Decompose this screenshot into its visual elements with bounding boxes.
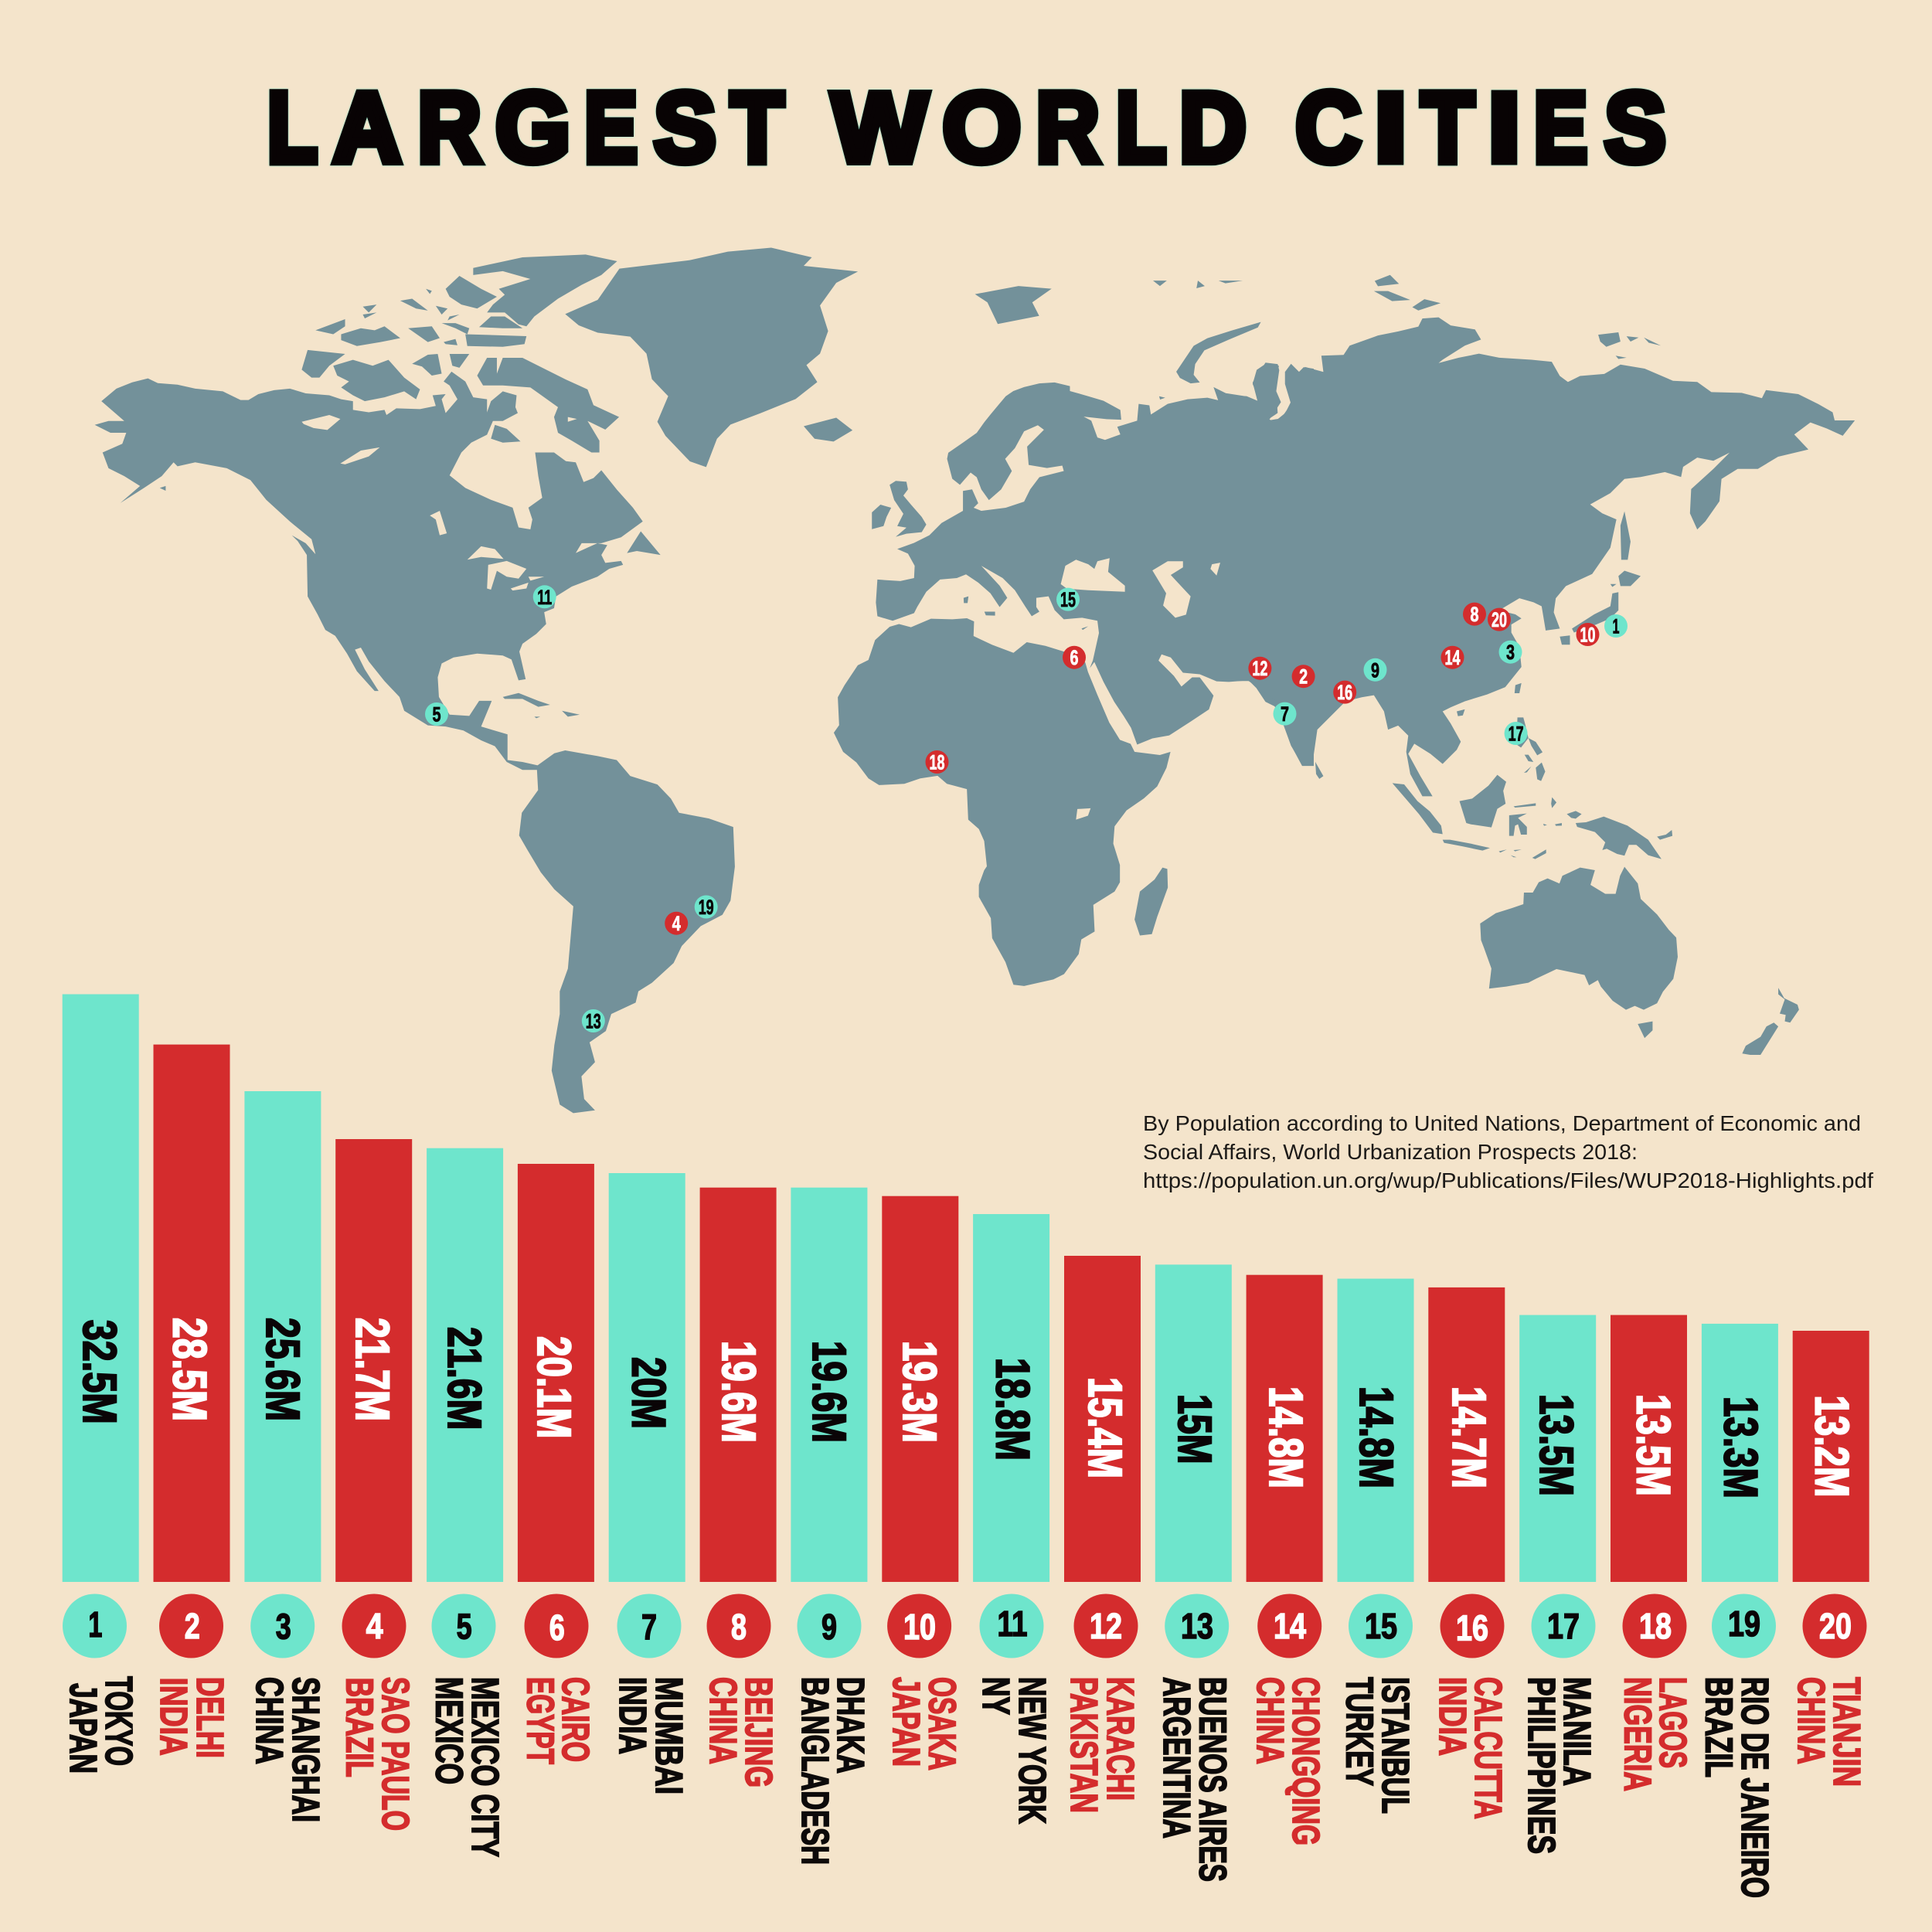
- badge 14: [1257, 1594, 1321, 1658]
- label Mexico City Mexico: MEXICO: [428, 1677, 470, 1784]
- label Chongqing China: [1249, 1677, 1326, 1845]
- badge 10: [887, 1594, 951, 1658]
- marker 20: 20: [1492, 608, 1507, 631]
- bar 2 Delhi: 28.5M: [164, 1318, 216, 1421]
- label Istanbul Turkey: TURKEY: [1338, 1677, 1380, 1786]
- map: Africa: [834, 618, 1171, 986]
- map markers: [425, 585, 1628, 1032]
- map: North America: [95, 254, 661, 770]
- badge 16: [1440, 1594, 1504, 1658]
- marker 6: 6: [1070, 646, 1079, 669]
- bar 1 Tokyo: 32.5M: [73, 1320, 126, 1424]
- bar 4 Sao Paulo: 21.7M: [346, 1318, 399, 1421]
- bar 14 Chongqing: 14.8M: [1260, 1386, 1312, 1488]
- marker 14: 14: [1445, 646, 1461, 669]
- label Tianjin China: [1790, 1677, 1867, 1787]
- badge 8: [706, 1594, 771, 1658]
- bar 12 Karachi: [1064, 1256, 1141, 1582]
- badge 18: 18: [1639, 1606, 1672, 1646]
- bar chart: [63, 994, 1869, 1582]
- label Istanbul Turkey: ISTANBUL: [1374, 1677, 1416, 1814]
- marker 11: 11: [537, 586, 552, 609]
- title: S: [1604, 73, 1666, 183]
- title: G: [495, 72, 570, 182]
- marker 12: 12: [1252, 657, 1267, 680]
- label Shanghai China: CHINA: [248, 1677, 290, 1764]
- bar 18 Lagos: [1611, 1315, 1687, 1582]
- label Delhi India: DELHI: [189, 1677, 230, 1758]
- badge 2: 2: [185, 1606, 200, 1646]
- bar 3 Shanghai: [244, 1091, 321, 1582]
- label Karachi Pakistan: KARACHI: [1099, 1677, 1141, 1801]
- label Karachi Pakistan: [1063, 1677, 1141, 1813]
- label Beijing China: BEIJING: [737, 1677, 779, 1787]
- label Buenos Aires Argentina: ARGENTINA: [1155, 1677, 1197, 1838]
- bar 19 Rio de Janeiro: [1702, 1324, 1778, 1582]
- badge 9: 9: [821, 1607, 837, 1647]
- label Manila Philippines: MANILA: [1556, 1677, 1597, 1786]
- marker 2: [1292, 665, 1315, 689]
- bar 7 Mumbai: [609, 1173, 685, 1582]
- title: R: [1036, 72, 1100, 182]
- title: I: [1488, 73, 1521, 183]
- marker 4: [665, 912, 688, 935]
- badge 2: [159, 1594, 223, 1658]
- badge 13: [1165, 1594, 1229, 1658]
- badge 13: 13: [1181, 1606, 1213, 1646]
- bar 6 Cairo: 20.1M: [528, 1336, 580, 1439]
- label Istanbul Turkey: [1338, 1677, 1416, 1814]
- label Tianjin China: CHINA: [1790, 1677, 1832, 1764]
- badge 20: 20: [1819, 1606, 1852, 1646]
- marker 15: 15: [1060, 588, 1076, 611]
- label Mumbai India: [611, 1677, 689, 1794]
- marker 2: 2: [1299, 665, 1308, 689]
- label Cairo Egypt: [519, 1677, 596, 1764]
- bar 4 Sao Paulo: [335, 1139, 412, 1582]
- map: Svalbard and Arctic islands: [975, 281, 1243, 324]
- badge 7: 7: [641, 1607, 657, 1647]
- label Chongqing China: CHONGQING: [1284, 1677, 1326, 1845]
- label Sao Paulo Brazil: [338, 1677, 416, 1831]
- badge 6: [524, 1594, 589, 1658]
- bar 20 Tianjin: [1793, 1331, 1869, 1582]
- map: Southeast Asia and Oceania: [1393, 717, 1799, 1055]
- badge 6: 6: [549, 1607, 565, 1648]
- marker 19: 19: [699, 896, 714, 919]
- marker 8: [1463, 603, 1486, 626]
- bar 14 Chongqing: [1247, 1275, 1323, 1582]
- bar 9 Dhaka: 19.6M: [803, 1341, 855, 1443]
- map: East and South Asia: [1236, 275, 1855, 796]
- bar 5 Mexico City: 21.6M: [438, 1327, 491, 1430]
- badge 15: 15: [1365, 1606, 1397, 1646]
- title: T: [731, 73, 784, 183]
- label Tianjin China: TIANJIN: [1825, 1677, 1867, 1787]
- source note: By Population according to United Nations, Department of Economic and: [1143, 1111, 1861, 1135]
- label Manila Philippines: [1520, 1677, 1597, 1854]
- label Lagos Nigeria: LAGOS: [1651, 1677, 1693, 1768]
- badge 12: [1074, 1594, 1138, 1658]
- label Tokyo Japan: TOKYO: [97, 1676, 139, 1766]
- badge 9: [798, 1594, 861, 1658]
- marker 8: 8: [1470, 603, 1479, 626]
- marker 6: [1063, 646, 1086, 669]
- label Calcutta India: [1431, 1677, 1509, 1819]
- label Calcutta India: CALCUTTA: [1467, 1677, 1509, 1819]
- label Manila Philippines: PHILIPPINES: [1520, 1677, 1562, 1854]
- bar 18 Lagos: 13.5M: [1628, 1394, 1680, 1496]
- label Rio de Janeiro Brazil: BRAZIL: [1698, 1677, 1740, 1777]
- label Osaka Japan: JAPAN: [885, 1677, 927, 1767]
- label Osaka Japan: [885, 1677, 963, 1770]
- badge 1: [63, 1594, 127, 1658]
- bar 16 Calcutta: [1428, 1287, 1505, 1582]
- label Shanghai China: [248, 1677, 326, 1822]
- bar 6 Cairo: [518, 1164, 594, 1582]
- title: L: [1116, 72, 1166, 182]
- marker 1: 1: [1612, 615, 1620, 638]
- bar 20 Tianjin: 13.2M: [1805, 1396, 1858, 1498]
- bar 19 Rio de Janeiro: 13.3M: [1715, 1396, 1767, 1498]
- label Tokyo Japan: [62, 1676, 139, 1774]
- badge 1: 1: [88, 1604, 102, 1645]
- label Delhi India: [152, 1677, 230, 1758]
- bar 2 Delhi: [153, 1045, 230, 1582]
- badge 4: 4: [366, 1606, 383, 1646]
- badge 5: 5: [457, 1607, 472, 1647]
- marker 9: [1363, 658, 1386, 682]
- label Beijing China: CHINA: [702, 1677, 743, 1764]
- label Mumbai India: INDIA: [611, 1677, 653, 1754]
- badge 19: 19: [1728, 1604, 1760, 1644]
- marker 18: 18: [929, 751, 944, 774]
- marker 16: 16: [1337, 681, 1352, 704]
- label Delhi India: INDIA: [152, 1678, 194, 1756]
- title: D: [1179, 73, 1247, 183]
- title: E: [584, 72, 638, 183]
- title: A: [333, 73, 401, 183]
- title: [267, 72, 1666, 183]
- title: W: [832, 73, 928, 183]
- badge 8: 8: [731, 1607, 747, 1647]
- title: S: [654, 73, 716, 183]
- label Calcutta India: INDIA: [1431, 1677, 1473, 1756]
- badge 16: 16: [1456, 1608, 1488, 1648]
- bar 3 Shanghai: 25.6M: [257, 1318, 309, 1421]
- bar 5 Mexico City: [427, 1148, 503, 1582]
- label Tokyo Japan: JAPAN: [62, 1683, 104, 1774]
- label Lagos Nigeria: NIGERIA: [1617, 1677, 1658, 1791]
- bar 8 Beijing: [700, 1188, 777, 1582]
- bar 15 Istanbul: [1337, 1279, 1414, 1582]
- badge 12: 12: [1090, 1606, 1122, 1646]
- badge 19: [1712, 1594, 1776, 1658]
- marker 3: 3: [1506, 641, 1515, 664]
- label Cairo Egypt: CAIRO: [554, 1677, 596, 1762]
- badge 3: 3: [276, 1607, 291, 1647]
- map: Greenland, Iceland and South America: [519, 248, 858, 1113]
- label Lagos Nigeria: [1617, 1677, 1693, 1791]
- bar 7 Mumbai: 20M: [623, 1357, 675, 1429]
- label Rio de Janeiro Brazil: [1698, 1677, 1775, 1898]
- title: T: [1421, 73, 1474, 183]
- badge 11: 11: [997, 1604, 1028, 1644]
- label Mumbai India: MUMBAI: [648, 1677, 689, 1794]
- label Karachi Pakistan: PAKISTAN: [1063, 1677, 1104, 1813]
- source note: https://population.un.org/wup/Publications/Files/WUP2018-Highlights.pdf: [1143, 1168, 1873, 1192]
- badge 4: [342, 1594, 406, 1658]
- bar 8 Beijing: 19.6M: [713, 1341, 765, 1443]
- badge 3: [250, 1594, 315, 1658]
- label Mexico City Mexico: MEXICO CITY: [464, 1677, 505, 1857]
- label Mexico City Mexico: [428, 1677, 505, 1857]
- marker 10: 10: [1580, 623, 1595, 646]
- marker 13: 13: [586, 1009, 601, 1032]
- bar 15 Istanbul: 14.8M: [1350, 1386, 1403, 1488]
- city and country labels: [62, 1676, 1867, 1898]
- bar 13 Buenos Aires: [1155, 1264, 1232, 1582]
- label Beijing China: [702, 1677, 779, 1787]
- bar 11 New York: 18.8M: [987, 1358, 1039, 1461]
- bar 17 Manila: [1519, 1315, 1596, 1582]
- bar 13 Buenos Aires: 15M: [1168, 1394, 1221, 1464]
- badge 11: [980, 1594, 1043, 1658]
- badge 14: 14: [1274, 1606, 1306, 1646]
- marker 7: 7: [1281, 702, 1289, 726]
- bar 1 Tokyo: [63, 994, 139, 1582]
- label Osaka Japan: OSAKA: [921, 1677, 963, 1770]
- marker 5: 5: [433, 703, 440, 726]
- label Shanghai China: SHANGHAI: [284, 1677, 326, 1822]
- label Dhaka Bangladesh: [794, 1677, 871, 1865]
- label Sao Paulo Brazil: BRAZIL: [338, 1678, 380, 1777]
- title: O: [943, 73, 1021, 183]
- marker 17: 17: [1509, 722, 1524, 745]
- marker 5: [425, 702, 448, 726]
- bar 17 Manila: 13.5M: [1530, 1394, 1583, 1496]
- bar 10 Osaka: [882, 1196, 958, 1582]
- title: E: [1534, 72, 1587, 183]
- label Dhaka Bangladesh: DHAKA: [829, 1677, 871, 1774]
- marker 3: [1499, 641, 1522, 664]
- badge 15: [1349, 1594, 1413, 1658]
- badge 17: [1532, 1594, 1595, 1658]
- label New York NY: NY: [975, 1677, 1016, 1715]
- bar 10 Osaka: 19.3M: [893, 1341, 946, 1443]
- badge 20: [1802, 1594, 1867, 1658]
- label Buenos Aires Argentina: [1155, 1677, 1233, 1882]
- badge 10: 10: [903, 1607, 936, 1647]
- label Cairo Egypt: EGYPT: [519, 1677, 560, 1764]
- source note: [1143, 1111, 1873, 1192]
- label Sao Paulo Brazil: SAO PAULO: [374, 1677, 416, 1831]
- label New York NY: [975, 1677, 1053, 1824]
- marker 1: [1604, 614, 1628, 638]
- title: I: [1374, 73, 1407, 183]
- source note: Social Affairs, World Urbanization Prospects 2018:: [1143, 1140, 1638, 1164]
- title: L: [267, 72, 318, 182]
- bar 9 Dhaka: [791, 1188, 867, 1582]
- label New York NY: NEW YORK: [1011, 1677, 1053, 1824]
- rank badges: [63, 1594, 1867, 1658]
- map: Europe and western Asia: [872, 322, 1314, 766]
- marker 4: 4: [672, 912, 681, 935]
- bar 16 Calcutta: 14.7M: [1443, 1386, 1495, 1488]
- marker 9: 9: [1371, 658, 1379, 682]
- marker 7: [1274, 702, 1297, 726]
- bar 12 Karachi: 15.4M: [1079, 1377, 1131, 1478]
- badge 5: [431, 1594, 496, 1658]
- bar 11 New York: [973, 1214, 1049, 1582]
- badge 18: [1623, 1594, 1686, 1658]
- badge 7: [617, 1594, 682, 1658]
- title: C: [1296, 72, 1361, 182]
- label Chongqing China: CHINA: [1249, 1677, 1291, 1764]
- title: R: [418, 72, 481, 182]
- badge 17: 17: [1547, 1606, 1580, 1646]
- world map: [95, 248, 1855, 1113]
